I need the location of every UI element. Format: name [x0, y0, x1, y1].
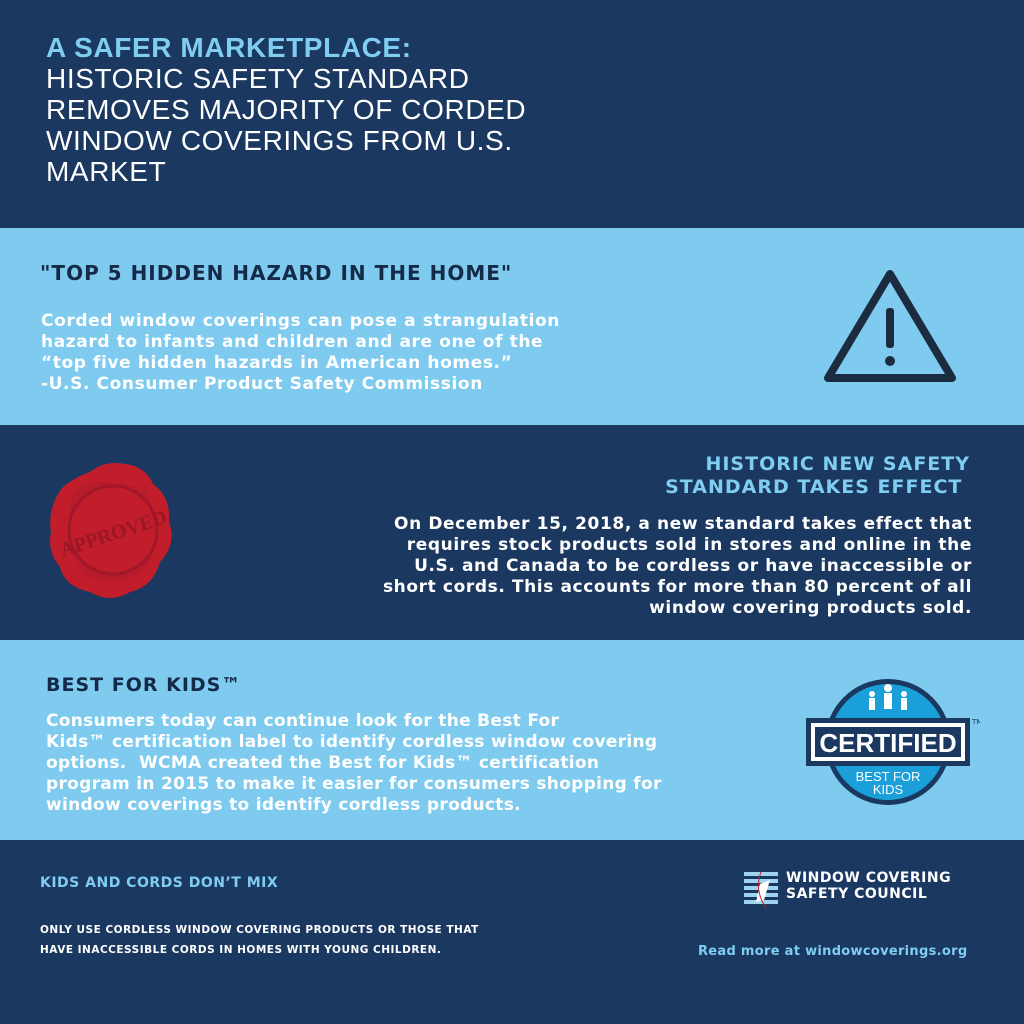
text: best for kids body: window coverings to identify cordless products. [46, 795, 521, 815]
text: best for kids body [46, 711, 662, 815]
icon: certified badge [806, 679, 980, 805]
title: REMOVES MAJORITY OF CORDED [46, 94, 526, 125]
heading: top 5: "TOP 5 HIDDEN HAZARD IN THE HOME" [40, 261, 512, 285]
title: MARKET [46, 156, 166, 187]
heading: historic standard: HISTORIC NEW SAFETY [705, 453, 970, 475]
text: hazard quote: Corded window coverings can pose a strangulation hazard to infants and children and are one of the “top five hidden hazards in American homes.” [41, 311, 560, 373]
title [46, 32, 526, 187]
text: best for kids body: program in 2015 to make it easier for consumers shopping for [46, 774, 662, 794]
title: A SAFER MARKETPLACE: [46, 32, 412, 63]
logo: window covering safety council: SAFETY COUNCIL [786, 886, 927, 902]
text: best for kids body: Consumers today can continue look for the Best For [46, 711, 559, 731]
icon: approved wax seal: APPROVED [57, 506, 170, 562]
icon: certified badge: KIDS [873, 782, 903, 797]
heading: best for kids: BEST FOR KIDS™ [46, 674, 241, 696]
text: read more link: Read more at windowcoverings.org [698, 944, 967, 959]
heading: historic standard [665, 453, 970, 498]
panel: best for kids [0, 640, 1024, 840]
title: HISTORIC SAFETY STANDARD [46, 63, 470, 94]
icon: warning triangle [824, 270, 956, 382]
text: cordless advice: ONLY USE CORDLESS WINDOW COVERING PRODUCTS OR THOSE THAT HAVE INACCESSIBLE CORDS IN HOMES WITH YOUNG CHILDREN. [40, 924, 479, 956]
panel: hidden hazard [0, 228, 1024, 425]
icon: certified badge: CERTIFIED [819, 728, 957, 758]
icon: certified badge: BEST FOR [856, 769, 920, 784]
heading: kids and cords: KIDS AND CORDS DON’T MIX [40, 875, 278, 891]
title: WINDOW COVERINGS FROM U.S. [46, 125, 513, 156]
text: hazard quote: -U.S. Consumer Product Safety Commission [41, 374, 483, 394]
text: best for kids body: options. WCMA created the Best for Kids™ certification [46, 753, 599, 773]
icon: approved wax seal [50, 463, 172, 598]
text: standard details: On December 15, 2018, a new standard takes effect that requires stock products sold in stores and online in the U.S. and Canada to be cordless or have inaccessible or short cords. This accounts for more than 80 percent of all window covering products sold. [383, 514, 972, 618]
logo: window covering safety council: WINDOW COVERING [786, 870, 951, 886]
heading: historic standard: STANDARD TAKES EFFECT [665, 476, 962, 498]
text: best for kids body: Kids™ certification label to identify cordless window covering [46, 732, 657, 752]
logo: window covering safety council [744, 870, 951, 908]
